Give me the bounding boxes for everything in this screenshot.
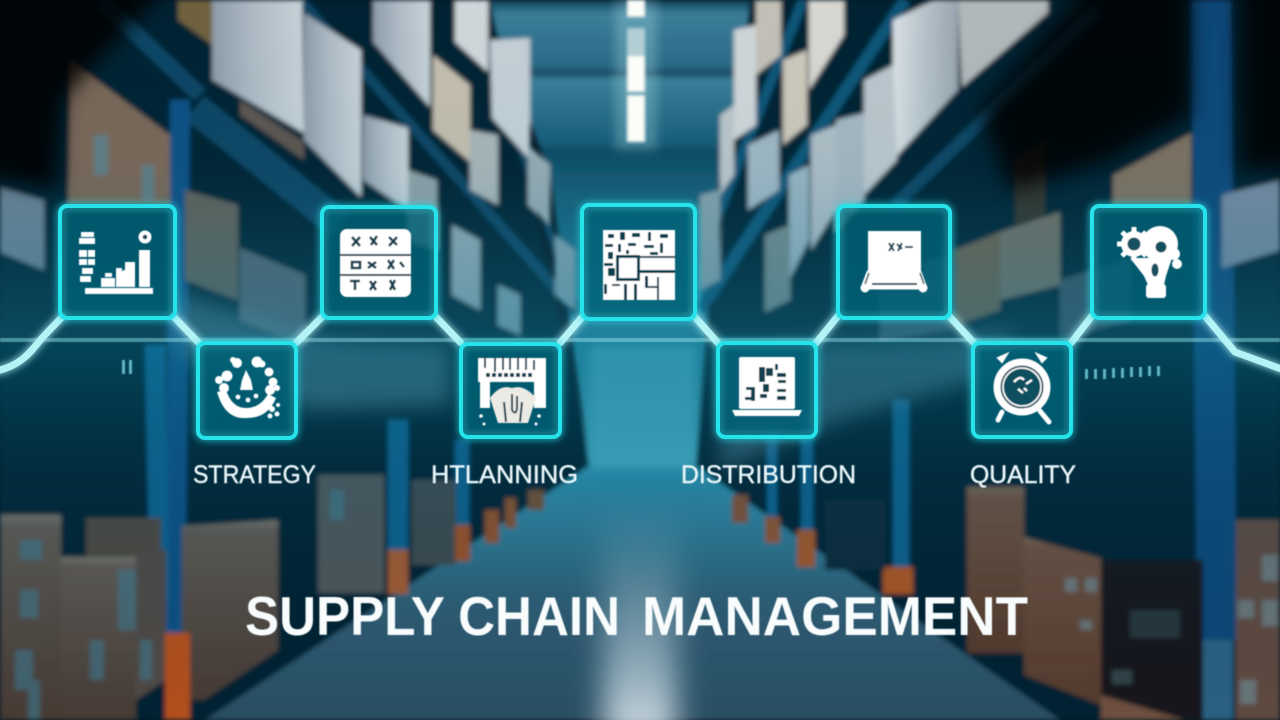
icon: modules grid [603,230,675,300]
dark right vignette [980,0,1190,190]
lower left pallets [0,475,544,720]
lower right pallets [732,487,1280,720]
upper left boxes [0,0,575,345]
right rack dark structure [695,0,1280,720]
card: planning [461,344,560,437]
card: quality [973,343,1071,437]
chain connector line [0,316,1280,371]
glow around ceiling lamps [615,0,657,150]
card: distribution [718,343,816,437]
ceiling lights [627,0,645,142]
horizontal light line [0,338,1280,342]
back wall glow [590,345,695,470]
card: process grid icon [322,207,436,318]
upper right boxes [700,0,1280,340]
card: laptop icon [838,206,950,318]
left rack dark structure [0,0,590,720]
aisle floor [205,465,1060,720]
label: DISTRIBUTION: DISTRIBUTION [681,461,856,489]
shelf light specks [122,360,1160,379]
dark far right vignette [1240,0,1280,170]
title [245,585,1028,647]
colour haze overlays [0,0,1280,340]
title: SUPPLY CHAIN [245,585,620,647]
title: MANAGEMENT [642,585,1028,647]
card: gears icon [1092,206,1205,318]
card: chart icon [60,206,175,318]
right lower mid haze [720,330,1010,470]
icon: worker grid [340,229,411,297]
icon: bar chart [79,230,153,294]
label: QUALITY: QUALITY [970,461,1076,489]
icon: laptop [860,231,928,292]
icon: laptop with chart [732,357,802,416]
label: STRATEGY: STRATEGY [193,461,316,489]
icon: gears and head [1117,226,1182,298]
aisle ceiling and back wall [485,0,760,470]
dark left vignette [0,0,190,190]
label: HTLANNING: HTLANNING [431,461,578,489]
icon: strategy cycle [215,356,280,418]
floor reflection [603,500,677,720]
left lower mid haze [175,295,450,410]
card: supply grid icon [582,205,695,319]
right rack beams [700,0,1233,720]
card: strategy [198,343,296,438]
icon: alarm clock [997,354,1049,422]
left rack beams [100,0,580,640]
icon: hand with modules [478,356,546,426]
